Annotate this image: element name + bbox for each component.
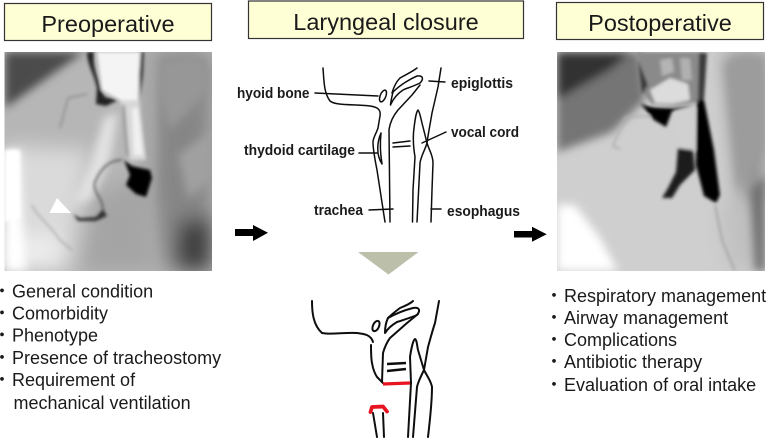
text block: postoperative checklist: Complications xyxy=(564,330,677,350)
heading: Laryngeal closure xyxy=(248,1,524,38)
text block: postoperative checklist: ・ xyxy=(545,286,563,306)
anatomy diagram: after closure xyxy=(312,301,439,437)
text block: postoperative checklist: ・ xyxy=(545,330,563,350)
x-ray image: postoperative swallow study xyxy=(557,52,765,271)
x-ray image: preoperative swallow study xyxy=(4,52,212,271)
text block: postoperative checklist: Evaluation of oral intake xyxy=(564,375,756,395)
outlines xyxy=(312,301,439,437)
text block: preoperative checklist: mechanical ventilation xyxy=(14,393,191,413)
text block: postoperative checklist: ・ xyxy=(545,308,563,328)
anatomy diagram: before closure xyxy=(237,68,520,222)
text block: preoperative checklist: Comorbidity xyxy=(12,304,108,324)
heading: Preoperative: Preoperative xyxy=(41,11,175,37)
text block: postoperative checklist: ・ xyxy=(545,352,563,372)
text block: postoperative checklist: Respiratory management xyxy=(564,286,766,306)
label: vocal cord: vocal cord xyxy=(451,125,519,141)
heading: Preoperative xyxy=(4,4,212,40)
heading: Postoperative: Postoperative xyxy=(588,10,732,36)
text block: preoperative checklist: Requirement of xyxy=(12,370,136,390)
icon: white arrowhead xyxy=(50,198,71,213)
text block: postoperative checklist: Airway management xyxy=(564,308,728,328)
label: thydoid cartilage: thydoid cartilage xyxy=(244,143,355,159)
text block: postoperative checklist xyxy=(545,286,766,395)
heading: Laryngeal closure: Laryngeal closure xyxy=(293,9,479,35)
red closure line: upper xyxy=(383,383,410,384)
text block: postoperative checklist: Antibiotic therapy xyxy=(564,352,702,372)
arrow: downward triangle xyxy=(358,252,418,274)
label: trachea: trachea xyxy=(314,203,364,219)
arrow: left to center xyxy=(235,225,268,241)
label: esophagus: esophagus xyxy=(447,204,520,220)
heading: Postoperative xyxy=(556,2,764,40)
red closure cap: lower xyxy=(370,406,387,412)
text block: preoperative checklist: Phenotype xyxy=(12,326,98,346)
text block: preoperative checklist xyxy=(0,282,221,413)
text block: preoperative checklist: Presence of tracheostomy xyxy=(12,348,221,368)
text block: postoperative checklist: ・ xyxy=(545,375,563,395)
label lines xyxy=(315,81,446,210)
neck and airway outlines xyxy=(323,68,441,222)
label: epiglottis: epiglottis xyxy=(451,76,513,92)
text block: preoperative checklist: General condition xyxy=(12,282,153,302)
arrow: center to right xyxy=(514,227,547,242)
label: hyoid bone: hyoid bone xyxy=(237,86,310,102)
